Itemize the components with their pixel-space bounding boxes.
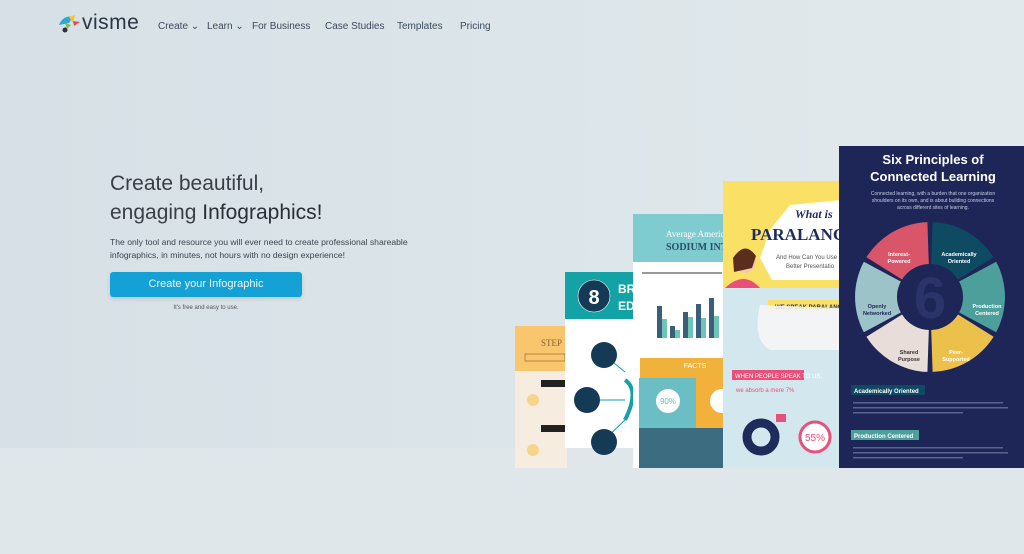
wheel: 6 [914,266,946,331]
card: sodium [633,214,749,468]
description [110,237,408,260]
text: Case Studies [325,21,384,32]
wheel: Shared [900,350,918,356]
card: step: STEP [541,338,562,348]
card: six principles: Connected learning, with a burden that one organization [871,191,995,197]
card: paralanguage: WHEN PEOPLE SPEAK TO US, [735,374,822,380]
wheel: Openly [868,304,887,310]
card: paralanguage: PARALANGU [751,225,858,244]
card: paralanguage: we absorb a mere 7% [735,388,795,394]
card: 8 brain: 8 [588,287,600,309]
wheel: Supported [942,357,970,363]
card: paralanguage: What is [795,207,833,221]
text: Templates [397,21,443,32]
card: 8 brain: ED [618,299,635,313]
card: sodium: Average American [666,229,734,239]
card: six principles: Six Principles of [882,152,984,167]
headline [110,172,323,224]
card: paralanguage: 55% [805,433,825,444]
card: paralanguage [723,181,858,468]
headline: Create beautiful, [110,172,264,195]
text: Learn ⌄ [207,21,244,32]
card: six principles: Production Centered [854,434,914,440]
wheel: Purpose [898,357,920,363]
note: It's free and easy to use. [173,305,239,311]
headline: engaging Infographics! [110,201,323,224]
card: paralanguage: And How Can You Use It [776,255,842,261]
description: The only tool and resource you will ever need to create professional shareable [110,237,408,247]
card: sodium: FACTS [684,363,707,370]
description: infographics, in minutes, not hours with no design experience! [110,250,345,260]
card: six principles: Academically Oriented [854,389,919,395]
card: six principles: across different sites of learning. [897,205,969,211]
CTA button: Create your Infographic [149,278,263,290]
card: 8 brain [565,272,636,455]
wheel [833,204,1024,390]
CTA button [110,272,302,297]
text: For Business [252,21,310,32]
wheel: Oriented [948,259,970,265]
text: Create ⌄ [158,21,199,32]
card: six principles: Connected Learning [870,169,996,184]
wheel: Centered [975,311,999,317]
card: six principles: shoulders on its own, and is about building connections [872,198,995,204]
text: Pricing [460,21,491,32]
card: sodium: SODIUM INTAKE [666,242,749,253]
card: 8 brain: BR [618,282,636,296]
wheel: Networked [863,311,891,317]
card: six principles [833,146,1024,468]
wheel: Interest- [888,252,910,258]
card: step [515,326,567,468]
card: sodium: 90% [660,397,676,406]
wheel: Powered [888,259,910,265]
wheel: Academically [941,252,978,258]
card: paralanguage: WE SPEAK PARALANGUAG [775,305,856,311]
nav menu [158,21,491,32]
card: paralanguage: Better Presentatio [786,264,835,270]
wheel: Peer- [949,350,963,356]
wheel: Production [972,304,1002,310]
logo: visme [82,11,139,34]
